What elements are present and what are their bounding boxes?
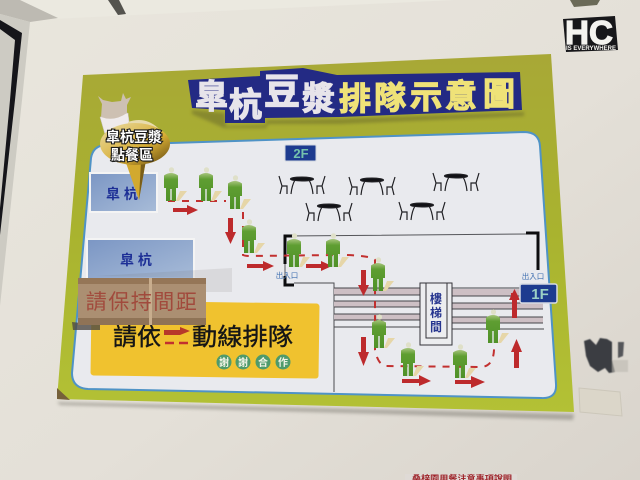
instruction text: 請依 [113, 324, 161, 351]
bottom sign [405, 473, 517, 480]
ordering area box [90, 173, 158, 213]
title [188, 68, 524, 128]
flow arrows [173, 205, 522, 388]
title white characters [195, 71, 335, 123]
HC logo sticker: IS EVERYWHERE [566, 46, 616, 52]
thank you badges: 謝 [219, 356, 229, 369]
title yellow characters: 圖 [483, 76, 515, 112]
entrance labels: 出入口 [276, 270, 298, 280]
thank you badges [216, 354, 290, 370]
title yellow characters: 示 [410, 79, 442, 115]
entrance labels: 出入口 [522, 271, 544, 281]
poster corner [57, 388, 70, 400]
thank you badges: 作 [278, 356, 288, 369]
title shadow [192, 110, 524, 128]
stairwell: 梯 [430, 305, 442, 320]
title yellow characters [339, 76, 515, 117]
ordering area callout: 皐杭豆漿 [106, 129, 162, 145]
stairwell: 間 [430, 320, 442, 334]
white floor plan panel [72, 132, 556, 398]
queue instruction panel [90, 300, 320, 379]
stairwell: 樓 [430, 291, 442, 306]
title yellow characters: 隊 [374, 80, 406, 116]
thank you badges: 合 [258, 356, 268, 369]
handwritten note: 請保持間距 [86, 291, 198, 314]
2F floor tag [285, 145, 316, 161]
entrance labels [276, 270, 544, 281]
milk splash icon [98, 93, 158, 138]
customers in queue [164, 167, 509, 378]
ceiling and door frame [0, 0, 600, 306]
2F floor tag: 2F [293, 146, 309, 161]
tables and chairs [279, 173, 479, 221]
staircase [334, 288, 544, 329]
walls [285, 233, 538, 392]
poster [57, 54, 574, 412]
title white characters: 漿 [302, 80, 335, 117]
torn black sticker residue [584, 338, 628, 373]
HC logo sticker: HC [565, 14, 613, 51]
second counter box: 皐 杭 [120, 252, 152, 268]
second counter box [87, 239, 194, 281]
ordering area callout: 點餐區 [111, 147, 153, 163]
title white characters: 豆 [264, 71, 300, 112]
title backing [188, 68, 522, 123]
thank you badges: 謝 [238, 356, 248, 369]
instruction text [113, 324, 293, 351]
title white characters: 杭 [229, 86, 262, 123]
ordering area callout [100, 123, 170, 200]
1F floor tag [520, 284, 557, 303]
instruction text: 動線排隊 [192, 324, 293, 351]
instruction arrow sample [164, 327, 190, 343]
title yellow characters: 排 [339, 81, 371, 117]
title yellow characters: 意 [445, 78, 477, 114]
packing tape [72, 268, 232, 330]
tape residue patch [579, 388, 622, 416]
title white characters: 皐 [195, 78, 228, 115]
stairwell [420, 283, 452, 345]
1F floor tag: 1F [531, 286, 549, 303]
cardboard note [78, 278, 206, 325]
ordering area box: 皐 杭 [106, 186, 138, 202]
queue dashed route [168, 201, 512, 367]
poster shadow [57, 402, 574, 420]
